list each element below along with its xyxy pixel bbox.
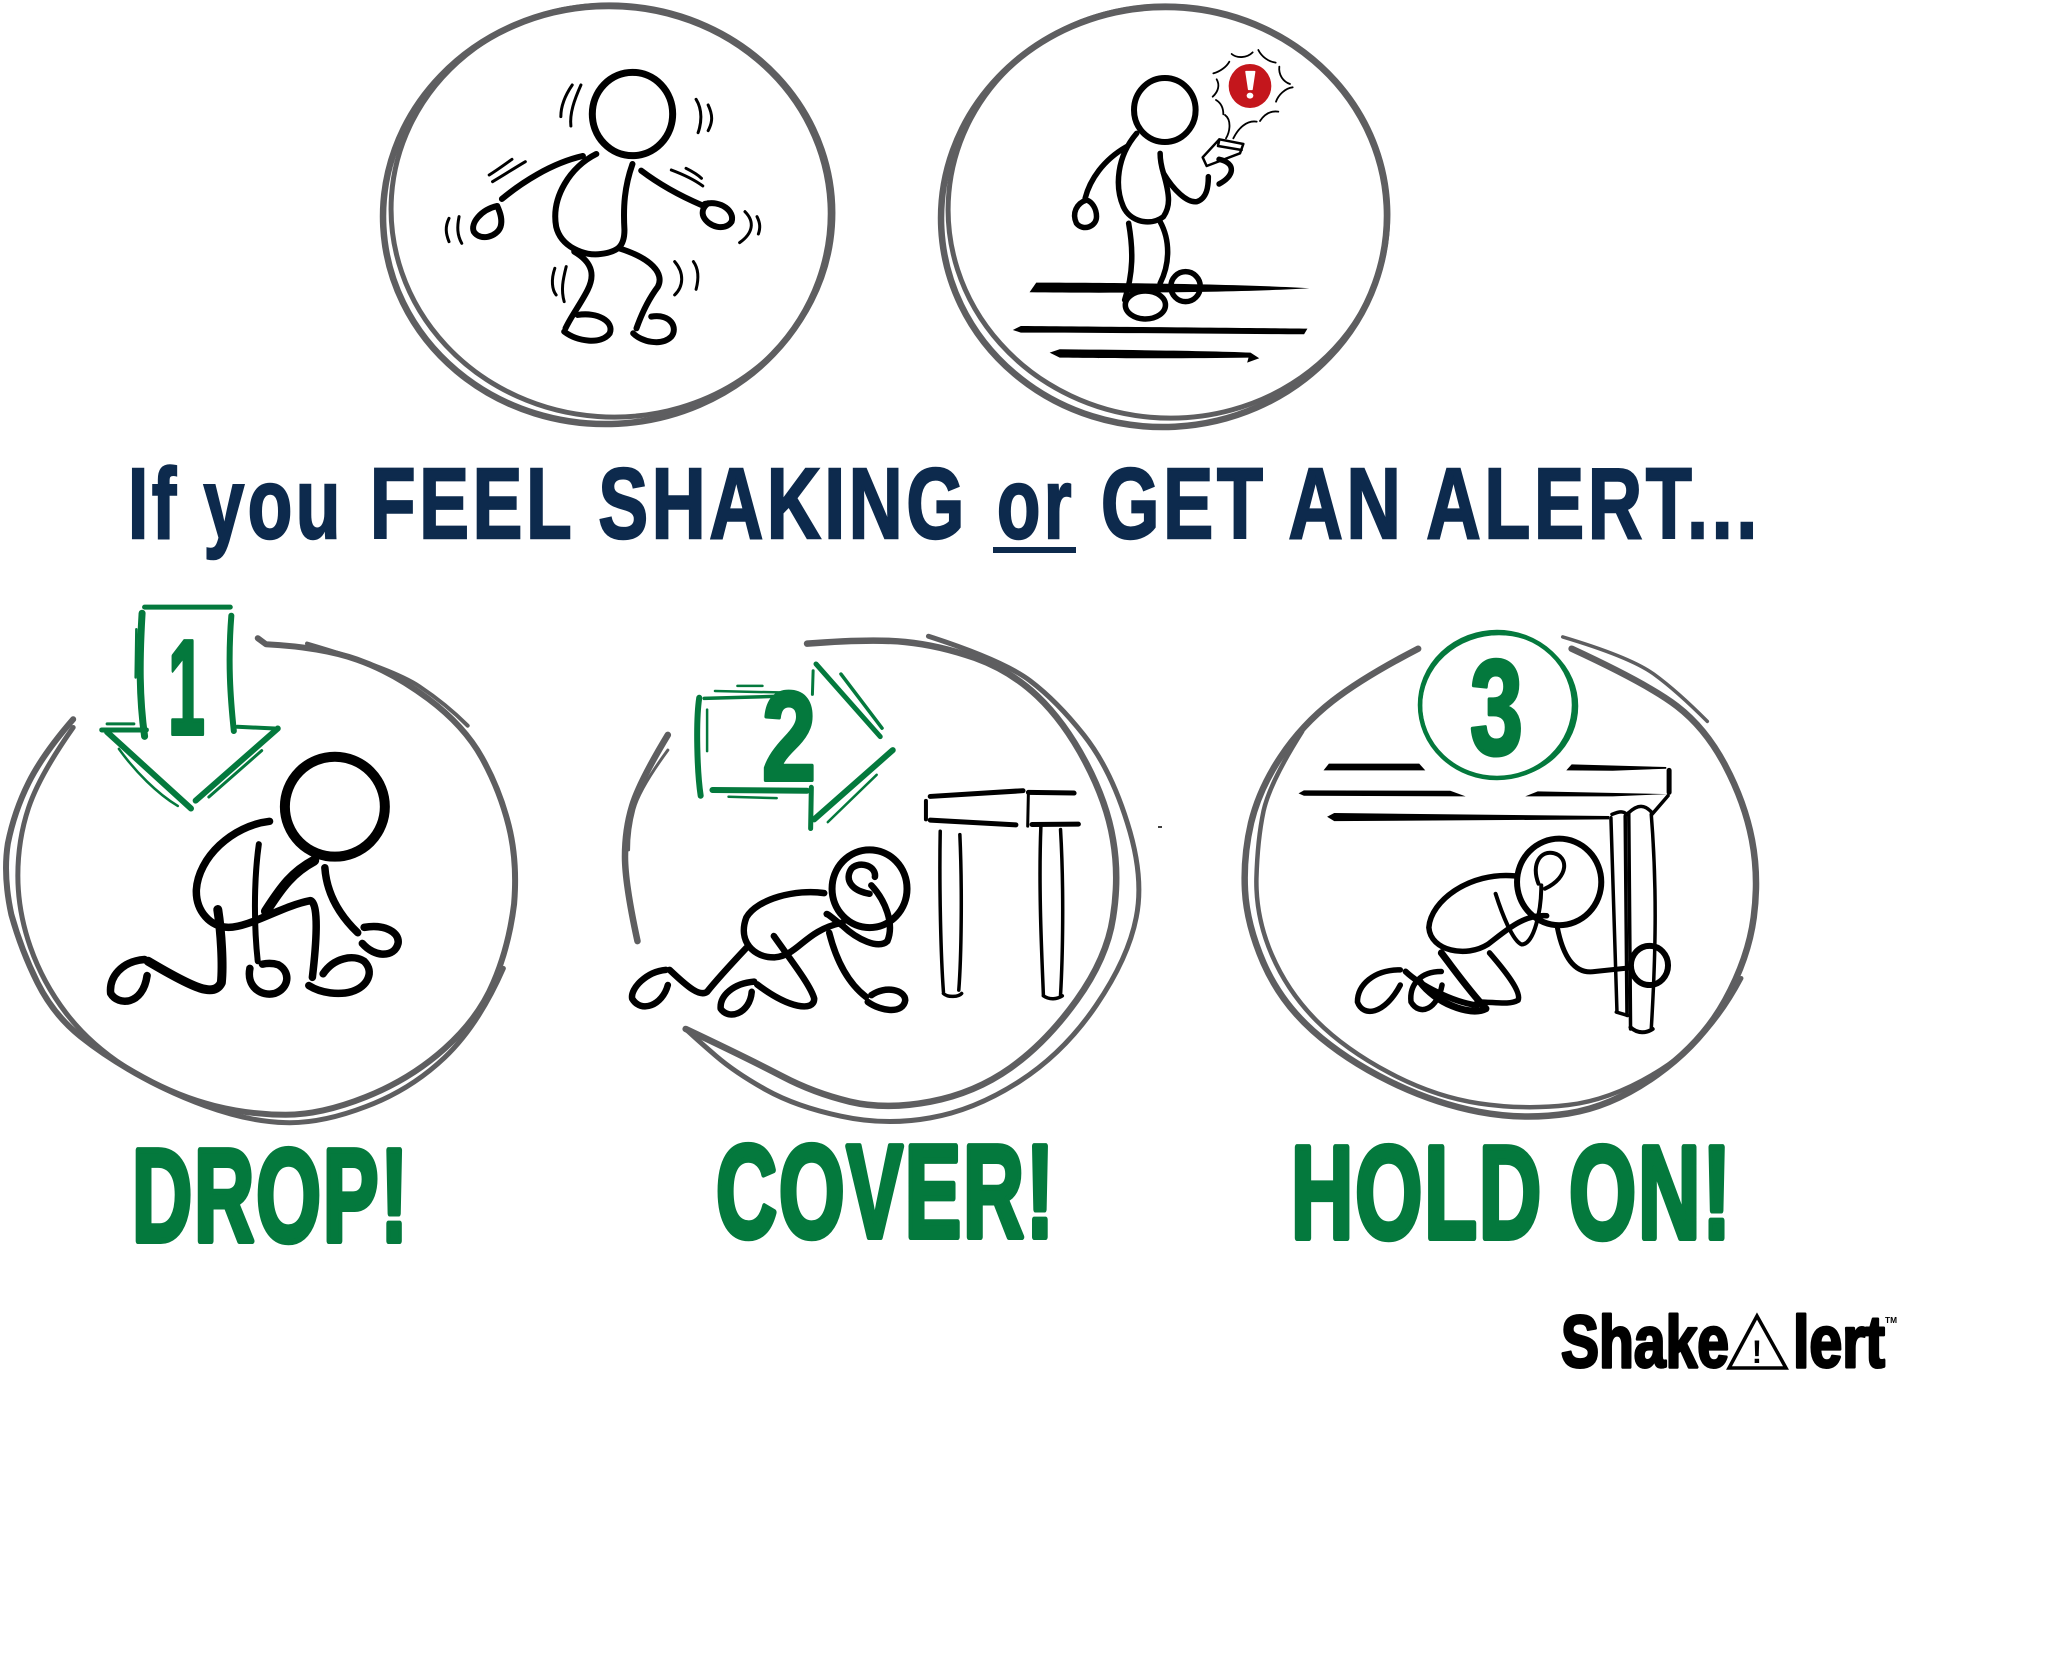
floor lines [1013,283,1309,363]
icon: green down arrow with number 1 [102,607,278,808]
icon: green circle with number 3: 3 [1470,632,1523,783]
logo: ShakeAlert: lert [1793,1302,1885,1383]
icon: green circle with number 3 [1420,632,1577,783]
circle outline: cover [625,636,1139,1122]
heading: If you feel shaking or get an alert: If you [128,448,344,560]
figure: shaking person [446,72,760,342]
logo: ShakeAlert: TM [1885,1316,1897,1325]
label: DROP!: DROP! [132,1122,410,1269]
logo: ShakeAlert: ! [1752,1334,1762,1370]
logo: ShakeAlert: Shake [1561,1302,1729,1383]
panel: step 3 hold on [1245,632,1756,1116]
panel: get an alert [930,0,1405,438]
icon: table [926,791,1078,999]
panel: step 2 cover [625,636,1162,1122]
heading: If you feel shaking or get an alert: FEEL SHAKING [370,448,968,560]
figure: person crawling toward table [632,850,907,1014]
speck mark [1158,826,1162,828]
logo: ShakeAlert [1561,1302,1897,1383]
icon: green down arrow with number 1: 1 [168,612,205,763]
circle outline: hold on [1245,637,1756,1116]
icon: phone with red alert burst [1203,50,1293,166]
heading: If you feel shaking or get an alert: or [997,448,1075,560]
circle outline: feel shaking [372,0,847,435]
panel: step 1 drop [6,607,515,1123]
label: COVER!: COVER! [716,1118,1056,1265]
label: HOLD ON!: HOLD ON! [1291,1119,1733,1266]
icon: green right arrow with number 2: 2 [762,666,816,807]
icon: table over person [1299,764,1669,1032]
circle outline: drop [6,638,515,1123]
heading: If you feel shaking or get an alert [128,448,1761,560]
icon: green right arrow with number 2 [697,664,893,829]
panel: feel shaking [372,0,847,435]
heading: If you feel shaking or get an alert: GET AN ALERT... [1101,448,1761,560]
circle outline: get an alert [930,0,1405,438]
figure: person dropping to hands and knees [111,757,398,1001]
figure: person looking at phone [1013,78,1309,363]
figure: person holding table leg [1357,839,1668,1011]
